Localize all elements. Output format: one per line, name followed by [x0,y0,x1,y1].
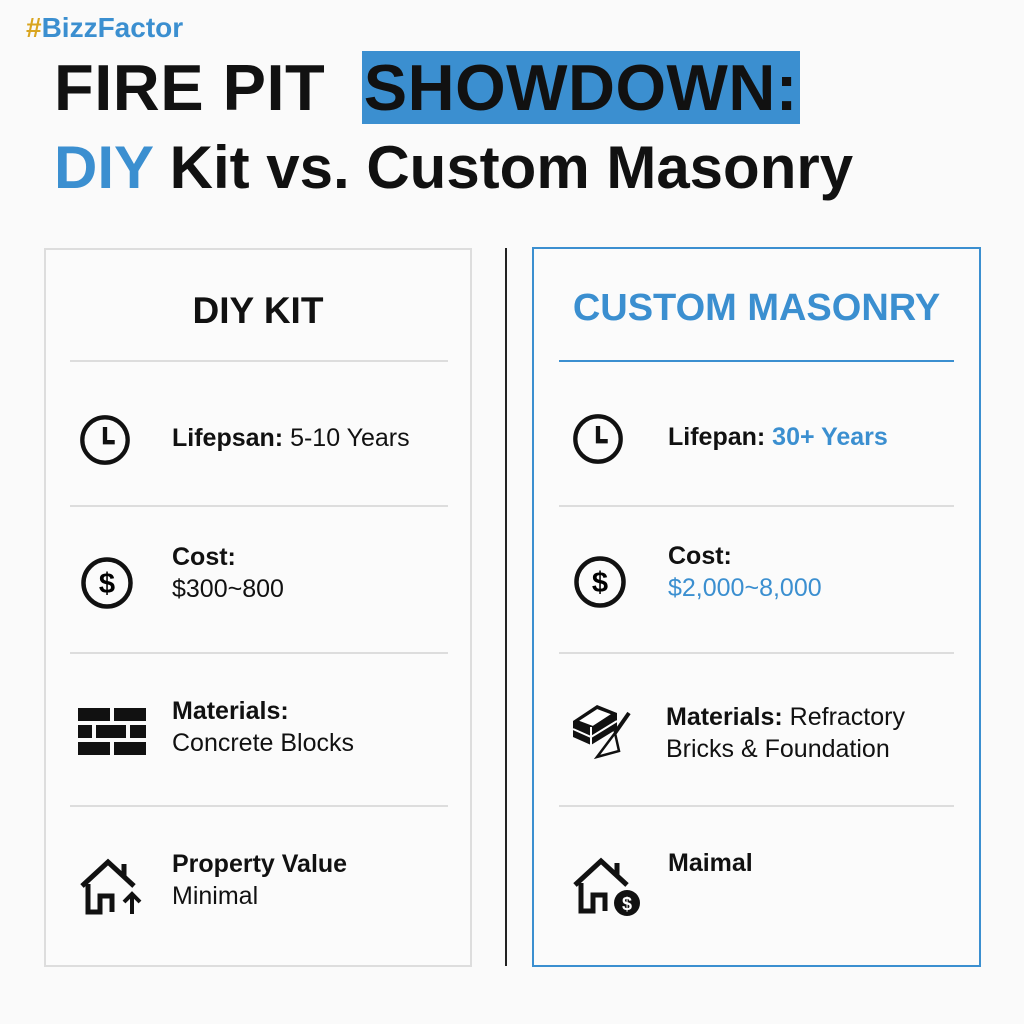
icon: house arrow [80,858,142,914]
row: cost: Cost: [172,543,236,571]
icon: clock [80,415,130,465]
row: property value [80,850,347,914]
icon: clock [573,414,623,464]
icon: brick wall [78,708,146,755]
icon: dollar: $ [592,567,608,599]
row: materials [573,703,905,763]
brand: #BizzFactor [26,12,183,43]
row: property value [573,849,753,916]
row: property value: Minimal [172,882,258,910]
icon: dollar: $ [99,568,115,600]
row: cost [574,542,822,608]
title: DIY Kit vs. Custom Masonry [54,134,853,201]
row: materials: Bricks & Foundation [666,735,890,763]
row: materials: Materials: Refractory [666,703,905,731]
row: materials [78,697,354,757]
heading: CUSTOM MASONRY: CUSTOM MASONRY [573,287,940,329]
title: FIRE PIT SHOWDOWN: [54,51,798,124]
row: materials: Materials: [172,697,289,725]
panel: custom masonry [532,247,981,967]
panel: DIY kit [44,248,472,967]
row: cost: $2,000~8,000 [668,574,822,602]
row: property value: Property Value [172,850,347,878]
row: cost: $300~800 [172,575,284,603]
row: lifespan [573,414,888,464]
icon: dollar [81,557,133,609]
row: cost: Cost: [668,542,732,570]
icon: house dollar: $ [622,894,632,914]
row: lifespan: Lifepsan: 5-10 Years [172,424,410,452]
row: cost [81,543,284,609]
icon: dollar [574,556,626,608]
icon: house dollar [573,858,640,916]
heading: DIY KIT: DIY KIT [193,290,323,331]
row: lifespan: Lifepan: 30+ Years [668,423,888,451]
icon: bricks and trowel [573,705,631,760]
row: materials: Concrete Blocks [172,729,354,757]
title [54,51,853,201]
divider [505,248,507,966]
row: lifespan [80,415,410,465]
row: property value: Maimal [668,849,753,877]
